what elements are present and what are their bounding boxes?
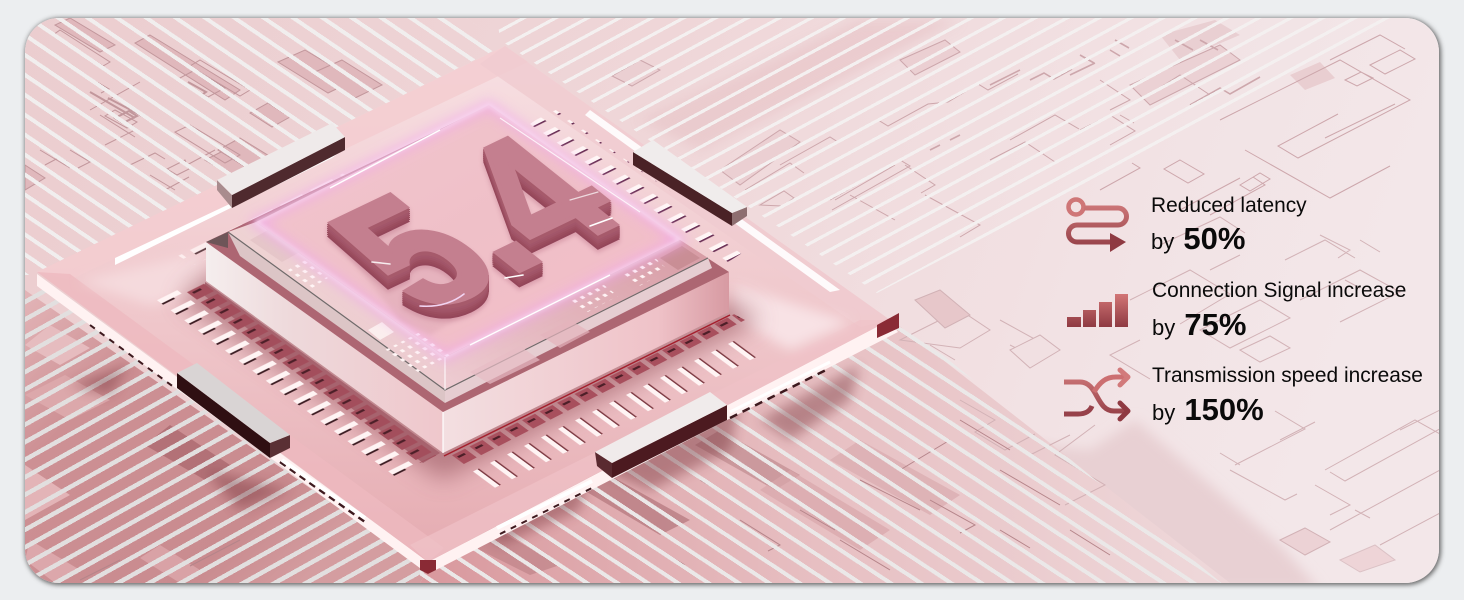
glass circuit dots (250, 230, 700, 384)
upper-left wire traces (25, 18, 492, 275)
glow outline (256, 105, 680, 357)
text: reduced latency: Reduced latency (1151, 194, 1307, 217)
text: by 150%: by 150% (1152, 392, 1264, 427)
board pins top (172, 108, 750, 265)
connector: lower left (177, 363, 290, 458)
digit glints (372, 192, 612, 306)
connector: lower right (595, 392, 727, 478)
feature: transmission speed (1064, 364, 1423, 427)
shadow around chip (180, 270, 760, 480)
lower-left wire traces (25, 290, 424, 583)
right side circuit traces (900, 217, 1445, 572)
feature: reduced latency (1068, 194, 1307, 256)
upper-right circuit traces (612, 20, 1415, 237)
text: transmission speed increase: Transmission speed increase (1152, 364, 1423, 387)
lower traces (80, 420, 1110, 580)
soft shadows on lower traces (70, 365, 860, 545)
text: by 75%: by 75% (1152, 307, 1246, 342)
lower-right wire traces (420, 326, 1221, 583)
upper-left circuit traces (25, 18, 382, 200)
lower circuit blocks (25, 325, 960, 583)
heading: 5.4: 5.4 (285, 103, 665, 342)
5.4 digit shadow (362, 226, 453, 332)
upper-right wire traces (498, 18, 1390, 293)
icon: signal bars (1067, 294, 1128, 327)
chip base block (206, 110, 729, 453)
icon: shuffle arrows (1064, 370, 1128, 419)
connector: upper left (217, 123, 345, 208)
contact pads and pins (152, 282, 765, 490)
connector: upper right (633, 140, 747, 226)
feature: connection signal (1067, 279, 1406, 342)
icon: winding path arrow (1068, 200, 1126, 252)
text: connection signal increase: Connection Signal increase (1152, 279, 1406, 302)
chip glass top (228, 105, 708, 390)
text: by 50%: by 50% (1151, 221, 1245, 256)
circuit board substrate (37, 46, 899, 574)
